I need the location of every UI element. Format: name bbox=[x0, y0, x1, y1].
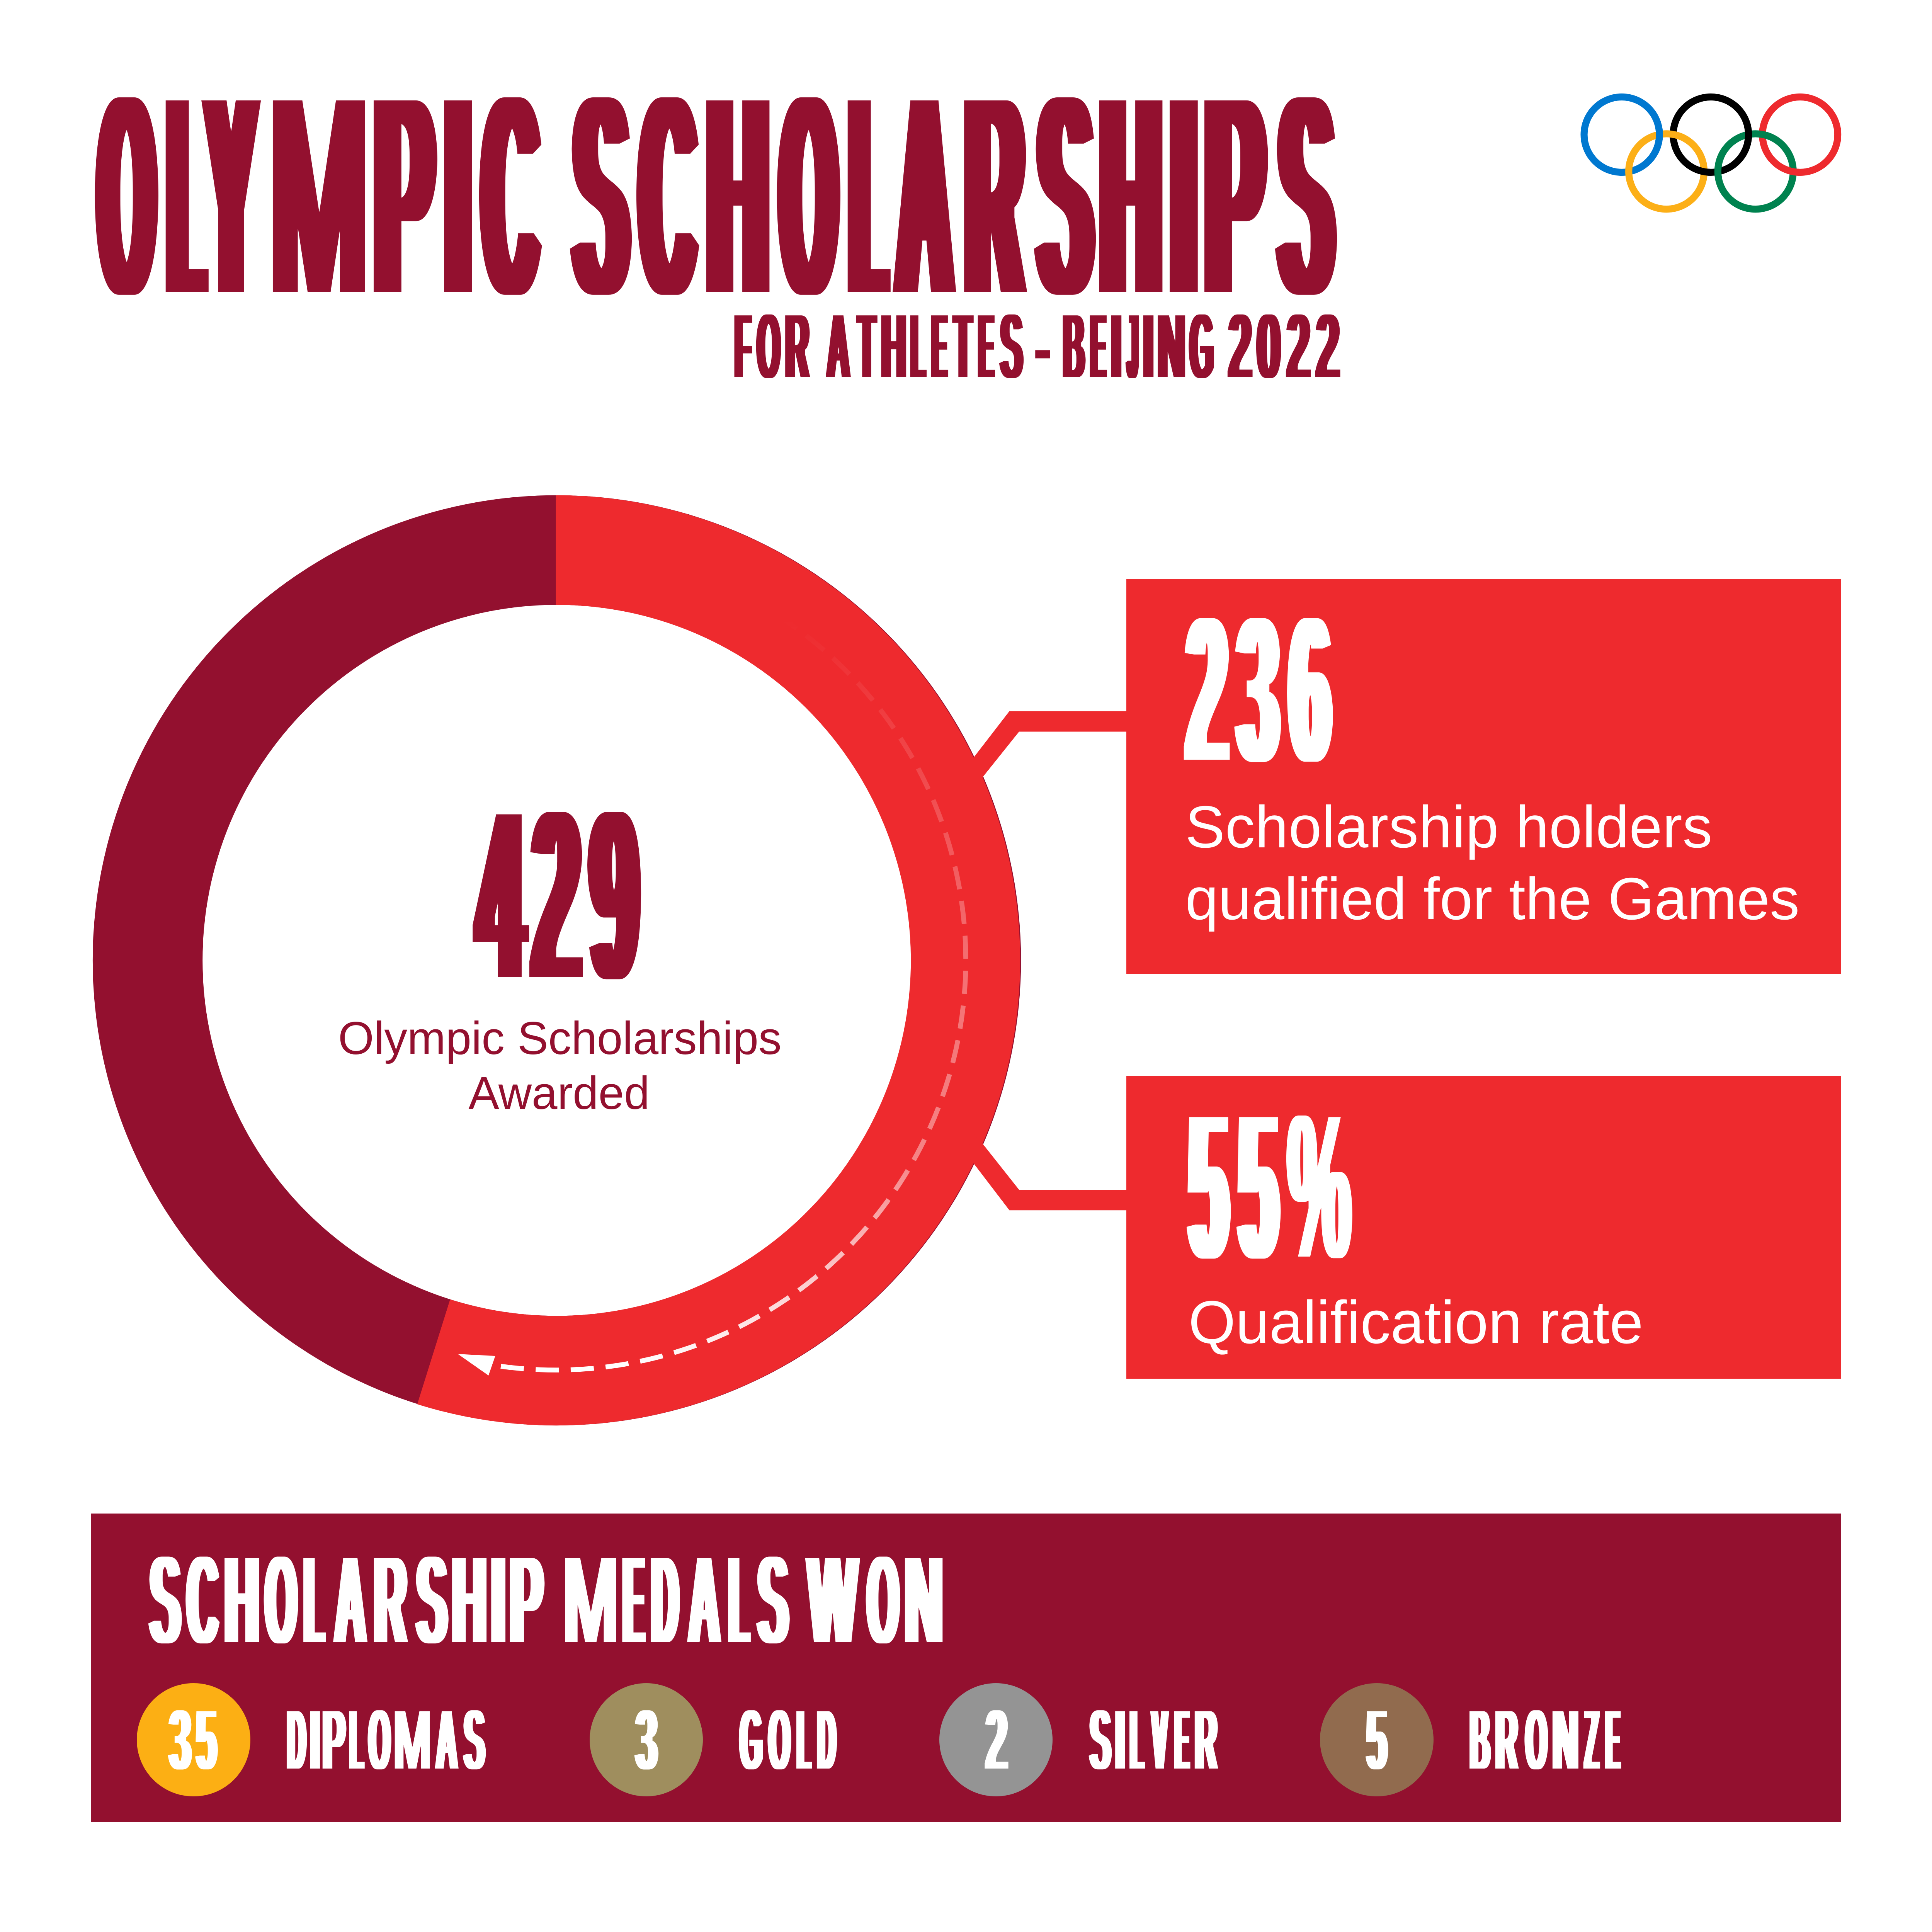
panel heading: M bbox=[563, 1527, 618, 1672]
subtitle: E bbox=[932, 293, 947, 399]
subtitle: J bbox=[1128, 293, 1138, 399]
title: C bbox=[484, 32, 537, 359]
subtitle: E bbox=[1091, 293, 1105, 399]
title: O bbox=[100, 32, 153, 359]
stat: 55%: 5 bbox=[1190, 1068, 1227, 1305]
donut centre label: Awarded bbox=[468, 1068, 650, 1119]
subtitle: 0 bbox=[1257, 293, 1281, 399]
panel heading: A bbox=[689, 1527, 720, 1672]
panel heading: C bbox=[187, 1527, 218, 1672]
stat: 236: 2 bbox=[1187, 571, 1227, 808]
medal item: gold: L bbox=[798, 1691, 810, 1789]
medal item: diplomas: M bbox=[394, 1691, 431, 1789]
panel heading: D bbox=[652, 1527, 678, 1672]
medal item: diplomas: A bbox=[436, 1691, 457, 1789]
title: I bbox=[1171, 32, 1196, 359]
panel heading: L bbox=[305, 1527, 323, 1672]
panel heading: S bbox=[150, 1527, 180, 1672]
panel heading: S bbox=[758, 1527, 788, 1672]
text: holders line bbox=[1185, 798, 1799, 916]
subtitle: H bbox=[881, 293, 906, 399]
title: S bbox=[1039, 32, 1091, 359]
title: H bbox=[1102, 32, 1160, 359]
subtitle: T bbox=[954, 293, 971, 399]
medal item: gold: O bbox=[769, 1691, 790, 1789]
medal item: silver: 2 bbox=[986, 1691, 1007, 1789]
subtitle bbox=[735, 299, 1344, 393]
panel heading: O bbox=[867, 1527, 898, 1672]
title: M bbox=[271, 32, 367, 359]
medal item: diplomas: O bbox=[369, 1691, 390, 1789]
panel heading: A bbox=[335, 1527, 366, 1672]
title: P bbox=[376, 32, 432, 359]
text: qualification rate: Qualification rate bbox=[1189, 1289, 1643, 1356]
subtitle: I bbox=[1143, 293, 1153, 399]
panel heading: R bbox=[374, 1527, 406, 1672]
panel heading: N bbox=[905, 1527, 943, 1672]
subtitle: 2 bbox=[1316, 293, 1340, 399]
stat: 55% bbox=[1186, 1100, 1353, 1264]
title: L bbox=[852, 32, 884, 359]
medal item: gold: 3 bbox=[636, 1691, 657, 1789]
donut chart: scholarships awarded bbox=[82, 485, 1140, 1437]
stat: 236: 3 bbox=[1238, 571, 1278, 808]
medal item: diplomas bbox=[137, 1683, 487, 1796]
title: I bbox=[446, 32, 470, 359]
medal item: bronze: N bbox=[1553, 1691, 1578, 1789]
subtitle: T bbox=[858, 293, 875, 399]
medal item: bronze: R bbox=[1496, 1691, 1518, 1789]
panel heading: E bbox=[624, 1527, 643, 1672]
medal item: silver: R bbox=[1195, 1691, 1217, 1789]
medal item: diplomas: S bbox=[464, 1691, 485, 1789]
stat: 236: 6 bbox=[1290, 571, 1330, 808]
subtitle: - bbox=[1036, 293, 1049, 399]
panel heading: S bbox=[417, 1527, 447, 1672]
subtitle: L bbox=[911, 293, 925, 399]
medal item: bronze: Z bbox=[1585, 1691, 1598, 1789]
panel heading: H bbox=[452, 1527, 486, 1672]
title: O bbox=[782, 32, 836, 359]
subtitle: G bbox=[1190, 293, 1214, 399]
panel heading: P bbox=[510, 1527, 543, 1672]
stat: 55%: % bbox=[1288, 1068, 1351, 1305]
donut centre number: 9 bbox=[591, 757, 638, 1034]
medal item: silver: E bbox=[1175, 1691, 1189, 1789]
title: A bbox=[898, 32, 951, 359]
title: H bbox=[709, 32, 767, 359]
medal item: silver bbox=[939, 1683, 1219, 1796]
medal item: silver: V bbox=[1152, 1691, 1167, 1789]
medal item: bronze: B bbox=[1470, 1691, 1490, 1789]
subtitle: 2 bbox=[1287, 293, 1310, 399]
subtitle: F bbox=[735, 293, 750, 399]
donut centre number: 4 bbox=[478, 757, 523, 1034]
subtitle: 2 bbox=[1228, 293, 1252, 399]
subtitle: N bbox=[1158, 293, 1185, 399]
panel: scholarship medals won bbox=[91, 1514, 1841, 1822]
icon: olympic rings bbox=[1580, 94, 1842, 213]
medal item: gold bbox=[590, 1683, 838, 1796]
title: L bbox=[170, 32, 202, 359]
medal item: bronze: E bbox=[1606, 1691, 1620, 1789]
medal item: bronze bbox=[1320, 1683, 1621, 1796]
donut centre number: 2 bbox=[533, 757, 580, 1034]
medal item: diplomas: L bbox=[350, 1691, 363, 1789]
panel heading bbox=[148, 1535, 947, 1665]
stat: 55%: 5 bbox=[1240, 1068, 1277, 1305]
subtitle: S bbox=[1000, 293, 1022, 399]
title: S bbox=[575, 32, 627, 359]
subtitle: A bbox=[827, 293, 849, 399]
panel: scholarship holders bbox=[1126, 579, 1841, 974]
title: Y bbox=[206, 32, 256, 359]
panel heading: O bbox=[266, 1527, 297, 1672]
donut centre label: Olympic Scholarships bbox=[338, 1013, 782, 1064]
medal item: silver: S bbox=[1090, 1691, 1111, 1789]
panel heading: H bbox=[225, 1527, 259, 1672]
medal item: diplomas: D bbox=[287, 1691, 306, 1789]
subtitle: I bbox=[1111, 293, 1121, 399]
title: C bbox=[641, 32, 695, 359]
medal item: silver: I bbox=[1115, 1691, 1125, 1789]
medal item: diplomas: I bbox=[310, 1691, 320, 1789]
subtitle: O bbox=[758, 293, 780, 399]
panel: qualification rate bbox=[1126, 1076, 1841, 1379]
medal item: bronze: 5 bbox=[1367, 1691, 1387, 1789]
text: holders line: Scholarship holders bbox=[1185, 794, 1713, 860]
medal item: gold: D bbox=[818, 1691, 836, 1789]
panel heading: I bbox=[492, 1527, 505, 1672]
subtitle: E bbox=[979, 293, 993, 399]
medal item: diplomas: P bbox=[323, 1691, 345, 1789]
donut centre label bbox=[338, 1015, 780, 1107]
title: S bbox=[1280, 32, 1332, 359]
title: P bbox=[1206, 32, 1264, 359]
text: holders line: qualified for the Games bbox=[1185, 866, 1799, 932]
stat: 236 bbox=[1183, 583, 1339, 796]
panel heading: L bbox=[730, 1527, 748, 1672]
medal item: bronze: O bbox=[1526, 1691, 1547, 1789]
medal item: gold: G bbox=[740, 1691, 762, 1789]
title bbox=[95, 50, 1342, 342]
title: R bbox=[967, 32, 1022, 359]
subtitle: R bbox=[786, 293, 809, 399]
panel heading: W bbox=[808, 1527, 857, 1672]
medal item: diplomas: 5 bbox=[196, 1691, 216, 1789]
medal item: diplomas: 3 bbox=[169, 1691, 191, 1789]
subtitle: B bbox=[1063, 293, 1085, 399]
medal item: silver: L bbox=[1131, 1691, 1143, 1789]
donut centre number bbox=[473, 771, 646, 1020]
